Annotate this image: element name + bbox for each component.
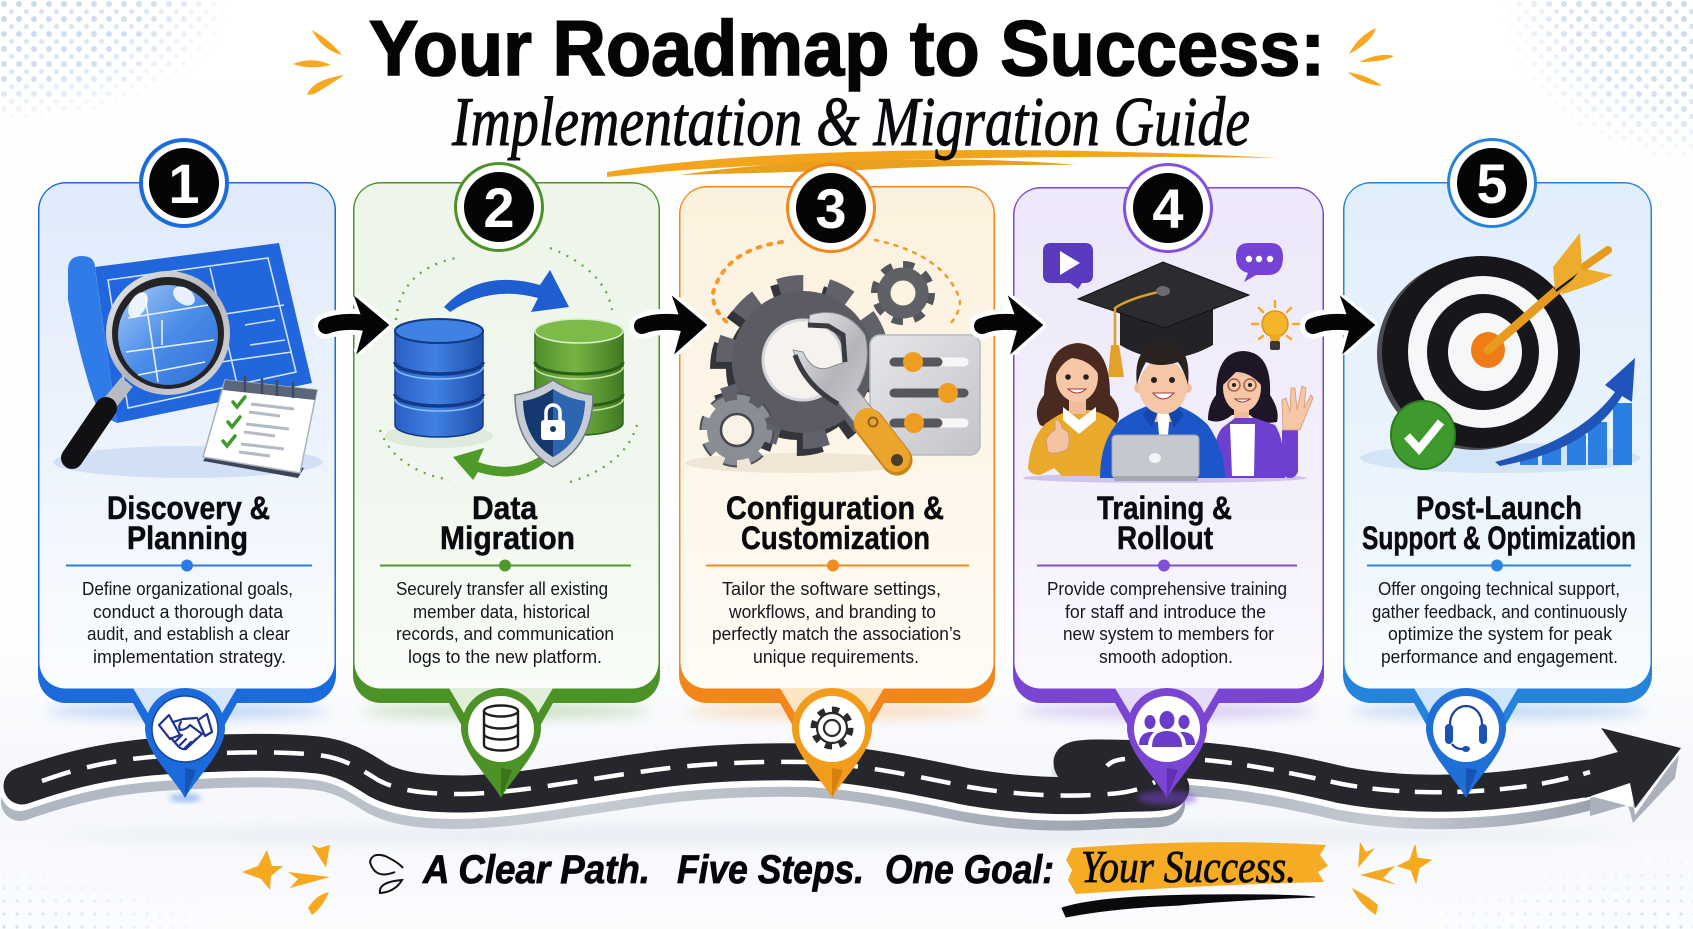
number badge 1 (139, 138, 229, 228)
woman left (1028, 343, 1120, 476)
icon: headset (1445, 706, 1487, 752)
illustration: database migration with shield (380, 248, 637, 482)
description (1047, 578, 1287, 667)
panel: step 5 post-launch support and optimization (1343, 182, 1652, 742)
step title (1097, 490, 1232, 556)
arrowhead (1590, 755, 1679, 823)
description: records, and communication (396, 623, 614, 644)
description: logs to the new platform. (408, 646, 602, 667)
description (82, 578, 293, 667)
map pin 2: database (461, 688, 541, 798)
tagline swirl (370, 855, 403, 893)
description: member data, historical (413, 601, 590, 622)
highlighted phrase: your success: Your Success. (1081, 841, 1296, 892)
illustration: graduation cap and team (1023, 243, 1313, 483)
target (1377, 256, 1580, 450)
description: Securely transfer all existing (396, 578, 608, 599)
description: for staff and introduce the (1065, 601, 1266, 622)
description: unique requirements. (753, 646, 919, 667)
arrow 4 to 5 (1313, 300, 1373, 350)
step title (1362, 490, 1636, 556)
green return arrow (453, 448, 548, 480)
description: performance and engagement. (1381, 646, 1618, 667)
icon: gear (814, 710, 850, 746)
divider with dot (1037, 560, 1297, 572)
description: perfectly match the association’s (712, 623, 961, 644)
illustration: blueprint, magnifier and checklist (53, 243, 323, 478)
light bulb (1252, 301, 1299, 350)
description: workflows, and branding to (728, 601, 936, 622)
panel: step 2 data migration (353, 182, 660, 742)
number badge 3 (786, 163, 876, 253)
arrow 3 to 4 (982, 300, 1041, 350)
divider with dot (66, 560, 312, 572)
description: conduct a thorough data (93, 601, 284, 622)
chat icon (1236, 243, 1283, 282)
large gear (721, 286, 879, 445)
green database (535, 319, 623, 435)
map pin 5: headset (1426, 688, 1506, 798)
number badge 2: 2 (483, 176, 515, 239)
step title: Discovery & (107, 490, 270, 526)
description: Tailor the software settings, (722, 578, 941, 599)
illustration: gears, wrench and sliders (685, 240, 980, 473)
step title (440, 490, 575, 556)
step title: Rollout (1117, 520, 1213, 556)
divider with dot (380, 560, 631, 572)
tagline sparkle left (242, 842, 330, 915)
blue migration arrow (444, 270, 569, 312)
panel: step 4 training and rollout (1013, 187, 1324, 742)
subtitle brush underline (607, 150, 1277, 177)
divider with dot (706, 560, 969, 572)
map pin 3: gear (792, 688, 872, 798)
description (1372, 578, 1628, 667)
subtitle: Implementation & Migration Guide (451, 84, 1250, 161)
step title (107, 490, 270, 556)
map pin 1: handshake (145, 688, 225, 802)
icon: handshake (159, 714, 212, 749)
tagline: A Clear Path. (422, 848, 650, 892)
highlighted phrase: your success (1062, 841, 1328, 917)
description: smooth adoption. (1099, 646, 1233, 667)
graduation cap (1078, 262, 1249, 377)
security shield (515, 380, 593, 467)
description: Define organizational goals, (82, 578, 293, 599)
arrow 2 to 3 (642, 300, 705, 350)
roadmap road with arrowhead (20, 728, 1681, 845)
step title: Configuration & (726, 490, 944, 526)
illustration: target, arrow, chart and check (1360, 233, 1640, 473)
blue database (395, 319, 483, 437)
growth bars (1520, 403, 1632, 465)
title sparks left (293, 30, 344, 95)
number badge 5 (1447, 138, 1537, 228)
icon: database (484, 706, 518, 750)
number badge 5: 5 (1476, 152, 1508, 215)
settings slider panel (870, 335, 980, 455)
title (369, 4, 1325, 161)
tagline: One Goal: (885, 848, 1054, 892)
growth arrow (1495, 358, 1635, 466)
number badge 4: 4 (1152, 177, 1184, 240)
description: implementation strategy. (93, 646, 286, 667)
woman right (1208, 351, 1313, 478)
arrow 1 to 2 (326, 300, 387, 350)
step title: Planning (127, 520, 248, 556)
description: optimize the system for peak (1388, 623, 1613, 644)
panel: step 1 discovery and planning (38, 182, 336, 742)
tagline: Five Steps. (677, 848, 864, 892)
bottom-left gear (706, 399, 768, 461)
map pin 4: people (1127, 688, 1207, 805)
number badge 2 (454, 162, 544, 252)
check badge (1391, 401, 1455, 469)
description: gather feedback, and continuously (1372, 601, 1628, 622)
laptop (1112, 435, 1199, 481)
number badge 4 (1123, 163, 1213, 253)
tagline (422, 848, 1054, 892)
description: new system to members for (1063, 623, 1274, 644)
checklist notepad (203, 376, 317, 478)
number badge 3: 3 (815, 177, 847, 240)
title sparks right (1348, 28, 1394, 86)
man center (1100, 342, 1225, 478)
number badge 1: 1 (168, 152, 200, 215)
dart arrow (1488, 233, 1613, 350)
tagline sparkle right (1352, 842, 1431, 915)
divider with dot (1367, 560, 1631, 572)
step title: Customization (741, 520, 930, 556)
step title: Post-Launch (1416, 490, 1582, 526)
main heading: Your Roadmap to Success: (369, 4, 1325, 92)
magnifier (72, 271, 230, 458)
lane dashes (42, 752, 1590, 796)
top-right gear (877, 267, 929, 319)
panel: step 3 configuration and customization (679, 186, 995, 742)
description: Offer ongoing technical support, (1378, 578, 1620, 599)
step title: Migration (440, 520, 575, 556)
step title: Training & (1097, 490, 1232, 526)
video icon (1043, 243, 1093, 289)
step title (726, 490, 944, 556)
wrench (793, 312, 903, 466)
step title: Data (472, 490, 537, 526)
description (712, 578, 961, 667)
description: Provide comprehensive training (1047, 578, 1287, 599)
description (396, 578, 614, 667)
description: audit, and establish a clear (87, 623, 290, 644)
icon: people (1139, 711, 1195, 747)
